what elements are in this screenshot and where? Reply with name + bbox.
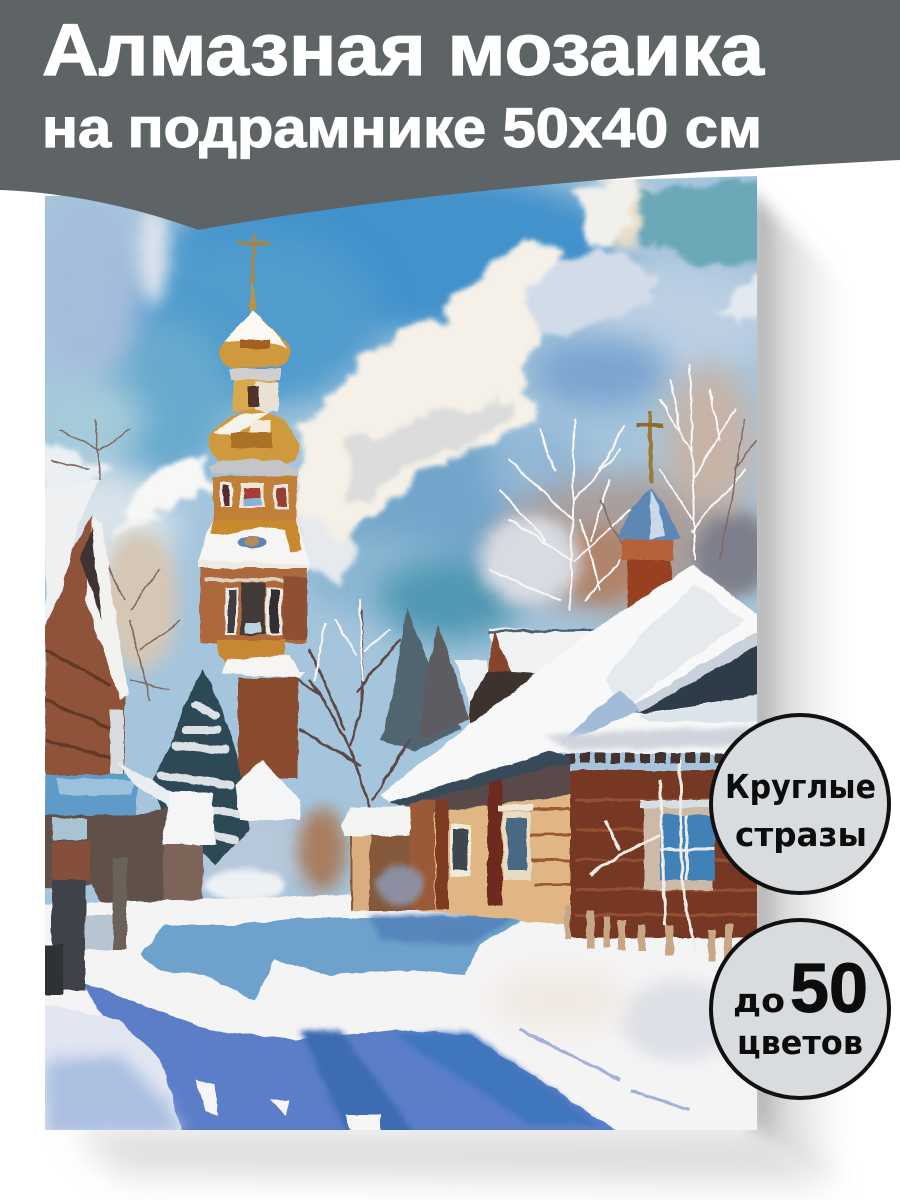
- drum with window: [233, 380, 279, 412]
- badge: up to 50 colours: 50: [790, 949, 868, 1027]
- title: Алмазная мозаика: [42, 10, 766, 91]
- cross: [237, 235, 269, 310]
- left house: [45, 480, 216, 903]
- small far house: [454, 627, 594, 723]
- clouds: [45, 178, 770, 585]
- snowy skirt: [198, 520, 310, 568]
- outbuilding: [342, 806, 424, 910]
- fence post and lantern: [45, 857, 128, 996]
- roof snow: [380, 565, 790, 806]
- background trees mass: [50, 365, 775, 700]
- walls: [400, 764, 757, 939]
- title: [42, 10, 766, 159]
- bare tree in centre: [294, 599, 411, 808]
- upper dome: [220, 310, 291, 380]
- middle buildings: [235, 760, 300, 820]
- conifers behind houses: [380, 608, 470, 750]
- badge: up to 50 colours: цветов: [737, 1023, 863, 1062]
- spruce: [152, 668, 250, 865]
- badge: round rhinestones: Круглые: [725, 767, 876, 806]
- badge: up to 50 colours: [711, 920, 889, 1098]
- lower annex: [45, 807, 168, 903]
- tower base: [238, 678, 298, 778]
- sky background: [45, 176, 757, 906]
- blue awning roof: [45, 775, 137, 815]
- twigs: [590, 760, 695, 950]
- trees and bushes behind yard: [195, 805, 346, 901]
- painting: winter village with church: [45, 176, 757, 1130]
- church bell tower: [198, 235, 310, 778]
- badge: round rhinestones: стразы: [735, 815, 867, 854]
- shed: [162, 792, 216, 845]
- canvas drop shadow: [70, 190, 850, 1190]
- windows: [450, 800, 716, 890]
- title: на подрамнике 50х40 см: [42, 96, 762, 159]
- balcony: [208, 460, 298, 478]
- road shadows: [20, 915, 690, 1140]
- gold band and snow ledge: [217, 640, 305, 678]
- snow ground: [45, 894, 757, 1130]
- fence: [565, 905, 733, 963]
- lower dome: [208, 408, 300, 466]
- main house: [380, 564, 757, 962]
- octagon with windows: [213, 476, 296, 520]
- badge: round rhinestones: [711, 715, 889, 893]
- brick tier with belfry: [198, 560, 310, 643]
- header banner: [0, 0, 900, 230]
- badge: up to 50 colours: до: [733, 981, 785, 1020]
- small tower with cross: [617, 412, 681, 612]
